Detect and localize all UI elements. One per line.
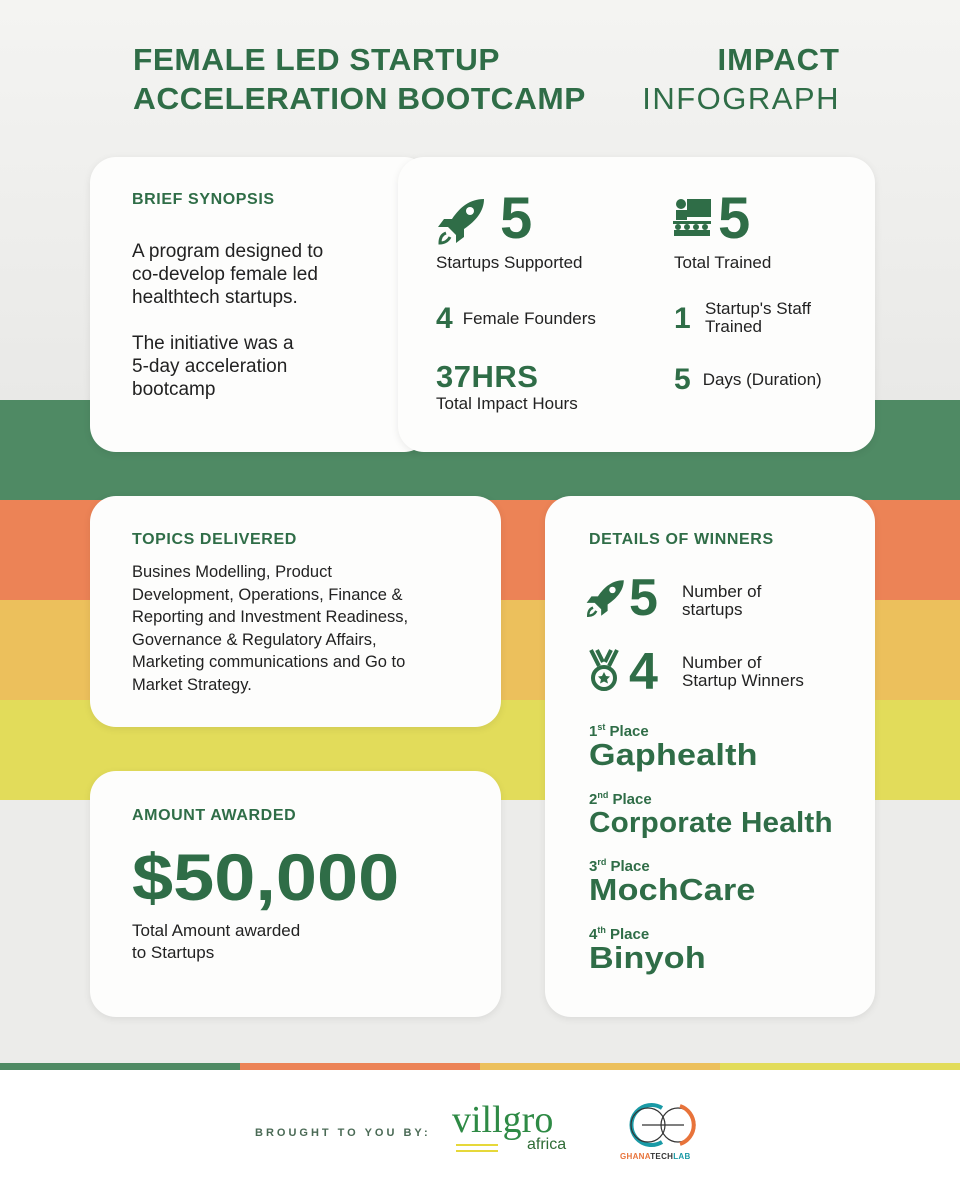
panel: topics delivered: [90, 496, 501, 727]
text: topics: Reporting and Investment Readiness,: [132, 608, 408, 626]
text: synopsis: healthtech startups.: [132, 287, 298, 308]
icon: rocket: [438, 199, 484, 244]
winner 3: MochCare: [589, 872, 756, 907]
icon: medal: [589, 649, 619, 691]
stat: 5 trained: 5: [718, 186, 750, 251]
heading: brief synopsis: BRIEF SYNOPSIS: [132, 191, 275, 208]
logo: villgro africa: [452, 1099, 566, 1153]
title: ACCELERATION BOOTCAMP: [133, 81, 586, 116]
number: $50,000: $50,000: [132, 840, 399, 914]
panel: amount awarded: [90, 771, 501, 1017]
text: topics: Marketing communications and Go to: [132, 653, 405, 671]
icon: trainer: [673, 199, 711, 236]
panel: details of winners: Number of: [682, 582, 761, 601]
panel: key stats: Startup's Staff: [705, 299, 811, 318]
text: synopsis: 5-day acceleration: [132, 356, 287, 377]
text: caption: to Startups: [132, 943, 214, 962]
text: synopsis: co-develop female led: [132, 264, 318, 285]
heading: topics: TOPICS DELIVERED: [132, 531, 297, 548]
text: synopsis: [132, 241, 323, 400]
stat: 4 female founders: 4 Female Founders: [436, 302, 596, 335]
winner 4: 4th Place: [589, 925, 649, 943]
stat: 4 winners: 4: [629, 643, 658, 701]
panel: key stats: Total Trained: [674, 253, 771, 272]
text: topics: [132, 563, 408, 694]
panel: key stats: Trained: [705, 317, 762, 336]
winner 3: 3rd Place: [589, 857, 650, 875]
logo: villgro africa: africa: [527, 1136, 566, 1153]
panel: details of winners: startups: [682, 600, 742, 619]
subtitle: impact infograph: IMPACT: [717, 42, 840, 77]
logo: ghanatechlab: [620, 1103, 696, 1161]
heading: amount: AMOUNT AWARDED: [132, 807, 296, 824]
panel: key stats: Startups Supported: [436, 253, 582, 272]
stat: 5 startups: 5: [629, 569, 658, 627]
panel: details of winners: Number of: [682, 653, 761, 672]
text: topics: Market Strategy.: [132, 676, 252, 694]
winner 1: Gaphealth: [589, 737, 758, 772]
text: caption: [132, 921, 300, 962]
subtitle: impact infograph: [642, 42, 840, 116]
title: [133, 42, 586, 116]
logo: ghanatechlab: GHANATECHLAB: [620, 1152, 691, 1161]
text: synopsis: A program designed to: [132, 241, 323, 262]
text: topics: Development, Operations, Finance &: [132, 586, 403, 604]
panel: details of winners: [545, 496, 875, 1017]
heading: winners: DETAILS OF WINNERS: [589, 531, 774, 548]
winner 2: [589, 790, 833, 839]
title: FEMALE LED STARTUP: [133, 42, 500, 77]
text: synopsis: The initiative was a: [132, 333, 294, 354]
winner 1: 1st Place: [589, 722, 649, 740]
footer: brought to you by: BROUGHT TO YOU BY:: [255, 1127, 431, 1139]
winner 4: Binyoh: [589, 940, 706, 975]
stat: 1 staff trained: 1: [674, 302, 691, 335]
stat: 5 startups: 5: [500, 186, 532, 251]
logo: villgro africa: villgro: [452, 1099, 553, 1141]
winner 2: Corporate Health: [589, 807, 833, 839]
panel: key stats: Total Impact Hours: [436, 394, 578, 413]
subtitle: impact infograph: INFOGRAPH: [642, 81, 840, 116]
stat: 5 days: 5 Days (Duration): [674, 363, 822, 396]
icon: rocket: [586, 580, 624, 617]
panel: brief synopsis: [90, 157, 430, 452]
text: synopsis: bootcamp: [132, 379, 215, 400]
panel: key stats: [398, 157, 875, 452]
text: topics: Busines Modelling, Product: [132, 563, 332, 581]
stat: 37hrs: 37HRS: [436, 359, 538, 394]
winner 2: 2nd Place: [589, 790, 652, 808]
text: topics: Governance & Regulatory Affairs,: [132, 630, 377, 648]
panel: details of winners: Startup Winners: [682, 671, 804, 690]
text: caption: Total Amount awarded: [132, 921, 300, 940]
